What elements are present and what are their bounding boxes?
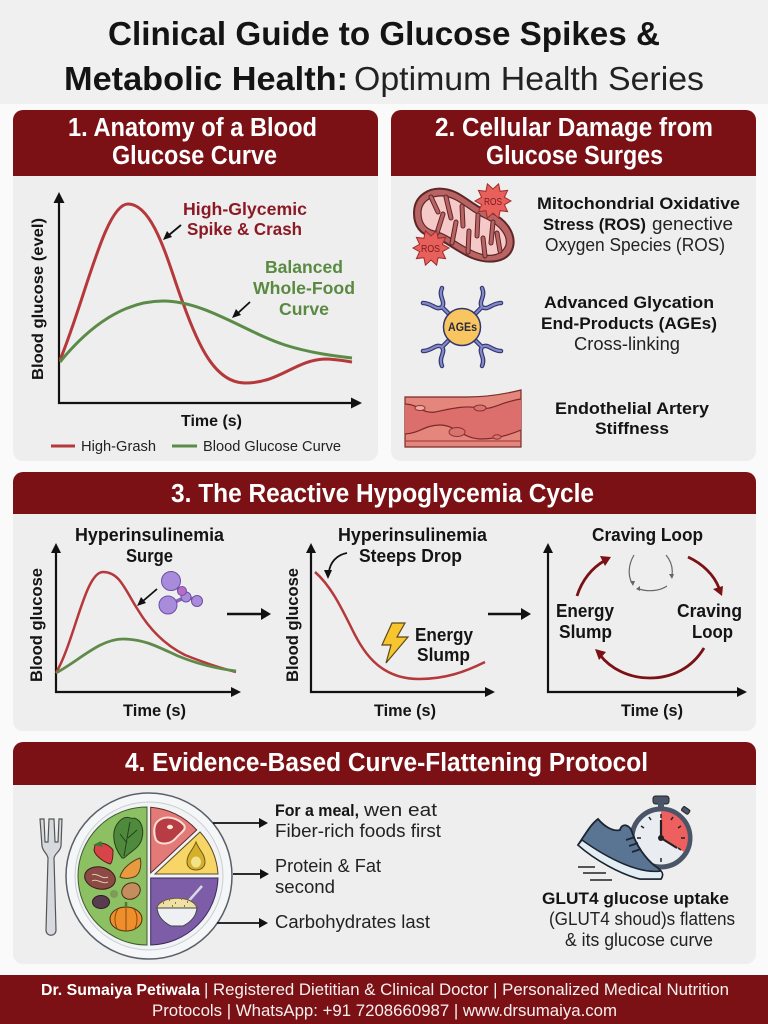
chart: hyperinsulinemia surge: Hyperinsulinemia bbox=[75, 525, 225, 545]
heading: panel 2: Glucose Surges bbox=[486, 142, 663, 170]
chart: glucose curves: Time (s) bbox=[181, 413, 242, 430]
icon: mitochondrion with ROS bbox=[413, 184, 514, 265]
legend: High-Grash bbox=[81, 438, 156, 455]
chart: glucose curves bbox=[30, 192, 362, 430]
icon: insulin molecule bbox=[159, 572, 202, 614]
panel: anatomy of a blood glucose curve bbox=[13, 110, 378, 461]
callout: high-glycemic spike: Spike & Crash bbox=[187, 219, 302, 239]
chart: craving loop: Energy bbox=[556, 601, 614, 621]
footer bbox=[0, 975, 768, 1024]
text: mitochondrial oxidative stress: genective bbox=[652, 214, 733, 234]
chart: steep drop: Blood glucose bbox=[284, 568, 302, 682]
icon: AGEs molecule bbox=[423, 288, 501, 366]
icon: lightning bolt bbox=[382, 623, 408, 663]
heading: panel 2 bbox=[391, 110, 756, 176]
title banner: Metabolic Health: bbox=[64, 61, 348, 98]
callout: balanced whole-food curve bbox=[232, 257, 355, 319]
chart: craving loop: Loop bbox=[692, 622, 733, 642]
text: mitochondrial oxidative stress bbox=[537, 194, 740, 255]
arrow: drop to loop bbox=[488, 608, 531, 620]
arrow: surge to drop bbox=[227, 608, 271, 620]
chart: glucose curves: Blood glucose (evel) bbox=[30, 218, 47, 380]
chart: craving loop: Time (s) bbox=[621, 701, 683, 720]
footer: Dr. Sumaiya Petiwala bbox=[41, 982, 200, 999]
chart: craving loop bbox=[543, 525, 747, 720]
plate: vegetables bbox=[78, 807, 147, 945]
icon: mitochondrion with ROS: ROS bbox=[421, 243, 440, 255]
plate: carbohydrates bbox=[151, 878, 218, 945]
text: eating order bbox=[275, 800, 441, 932]
chart: steep drop: Steeps Drop bbox=[359, 546, 462, 566]
text: GLUT4 glucose uptake: & its glucose curve bbox=[565, 930, 713, 950]
chart: craving loop: Craving Loop bbox=[592, 525, 703, 545]
heading: panel 3 bbox=[13, 472, 756, 514]
text: eating order: Fiber-rich foods first bbox=[275, 821, 441, 841]
chart: hyperinsulinemia surge: Time (s) bbox=[123, 701, 186, 720]
icon: divided plate bbox=[66, 793, 232, 959]
heading: panel 1: Glucose Curve bbox=[112, 142, 277, 170]
chart: hyperinsulinemia surge: Blood glucose bbox=[28, 568, 46, 682]
icon: fork bbox=[40, 819, 62, 935]
heading: panel 3: 3. The Reactive Hypoglycemia Cycle bbox=[171, 480, 594, 508]
icon: running shoe and stopwatch bbox=[578, 796, 690, 880]
legend: Blood Glucose Curve bbox=[203, 438, 341, 455]
icon: stiff artery bbox=[405, 390, 521, 447]
heading: panel 2: 2. Cellular Damage from bbox=[435, 114, 713, 142]
callout: high-glycemic spike bbox=[163, 199, 307, 240]
heading: panel 1: 1. Anatomy of a Blood bbox=[68, 114, 317, 142]
text: mitochondrial oxidative stress: Stress (ROS) bbox=[543, 215, 646, 234]
title banner: Optimum Health Series bbox=[354, 61, 704, 98]
callout: high-glycemic spike: High-Glycemic bbox=[183, 199, 307, 219]
chart: steep drop: Slump bbox=[417, 645, 470, 665]
text: advanced glycation end-products: End-Products (AGEs) bbox=[541, 314, 717, 333]
text: eating order: Protein & Fat bbox=[275, 856, 381, 876]
chart: steep drop: Energy bbox=[415, 625, 473, 645]
text: GLUT4 glucose uptake: GLUT4 glucose uptake bbox=[542, 889, 729, 908]
chart: steep drop: Time (s) bbox=[374, 701, 436, 720]
panel: curve-flattening protocol bbox=[13, 742, 756, 964]
text: endothelial artery stiffness: Endothelial Artery bbox=[555, 399, 710, 418]
icon: mitochondrion with ROS: ROS bbox=[484, 196, 502, 208]
text: advanced glycation end-products: Cross-linking bbox=[574, 334, 680, 354]
text: advanced glycation end-products: Advanced Glycation bbox=[544, 293, 714, 312]
text: eating order: wen eat bbox=[363, 800, 437, 820]
chart: steep drop: Hyperinsulinemia bbox=[338, 525, 488, 545]
text: endothelial artery stiffness: Stiffness bbox=[595, 419, 669, 438]
title banner: Clinical Guide to Glucose Spikes & bbox=[108, 16, 660, 53]
chart: craving loop: Slump bbox=[559, 622, 612, 642]
chart: hyperinsulinemia surge: Surge bbox=[126, 546, 173, 566]
footer: | Registered Dietitian & Clinical Doctor | Personalized Medical Nutrition bbox=[204, 981, 729, 999]
text: mitochondrial oxidative stress: Oxygen Species (ROS) bbox=[545, 235, 725, 255]
text: endothelial artery stiffness bbox=[555, 399, 710, 438]
heading: panel 1 bbox=[13, 110, 378, 176]
panel: reactive hypoglycemia cycle bbox=[13, 472, 756, 731]
legend bbox=[51, 438, 341, 455]
callout: balanced whole-food curve: Curve bbox=[279, 299, 329, 319]
plate: protein bbox=[151, 807, 197, 873]
heading: panel 4 bbox=[13, 742, 756, 785]
text: eating order: second bbox=[275, 877, 335, 897]
text: GLUT4 glucose uptake bbox=[542, 889, 735, 950]
icon: AGEs molecule: AGEs bbox=[448, 322, 477, 334]
footer: Protocols | WhatsApp: +91 7208660987 | www.drsumaiya.com bbox=[152, 1002, 617, 1020]
arrows: plate to order bbox=[213, 818, 269, 928]
panel: cellular damage from glucose surges bbox=[391, 110, 756, 461]
plate: fats bbox=[155, 832, 218, 874]
callout: balanced whole-food curve: Whole-Food bbox=[253, 278, 355, 298]
title banner bbox=[0, 0, 768, 104]
heading: panel 4: 4. Evidence-Based Curve-Flattening Protocol bbox=[125, 749, 648, 777]
chart: steep drop bbox=[284, 525, 495, 720]
text: GLUT4 glucose uptake: (GLUT4 shoud)s flattens bbox=[549, 909, 735, 929]
chart: hyperinsulinemia surge bbox=[28, 525, 241, 720]
text: eating order: For a meal, bbox=[275, 801, 359, 820]
text: mitochondrial oxidative stress: Mitochondrial Oxidative bbox=[537, 194, 740, 213]
callout: balanced whole-food curve: Balanced bbox=[265, 257, 343, 277]
text: eating order: Carbohydrates last bbox=[275, 912, 430, 932]
chart: craving loop: Craving bbox=[677, 601, 742, 621]
text: advanced glycation end-products bbox=[541, 293, 717, 354]
